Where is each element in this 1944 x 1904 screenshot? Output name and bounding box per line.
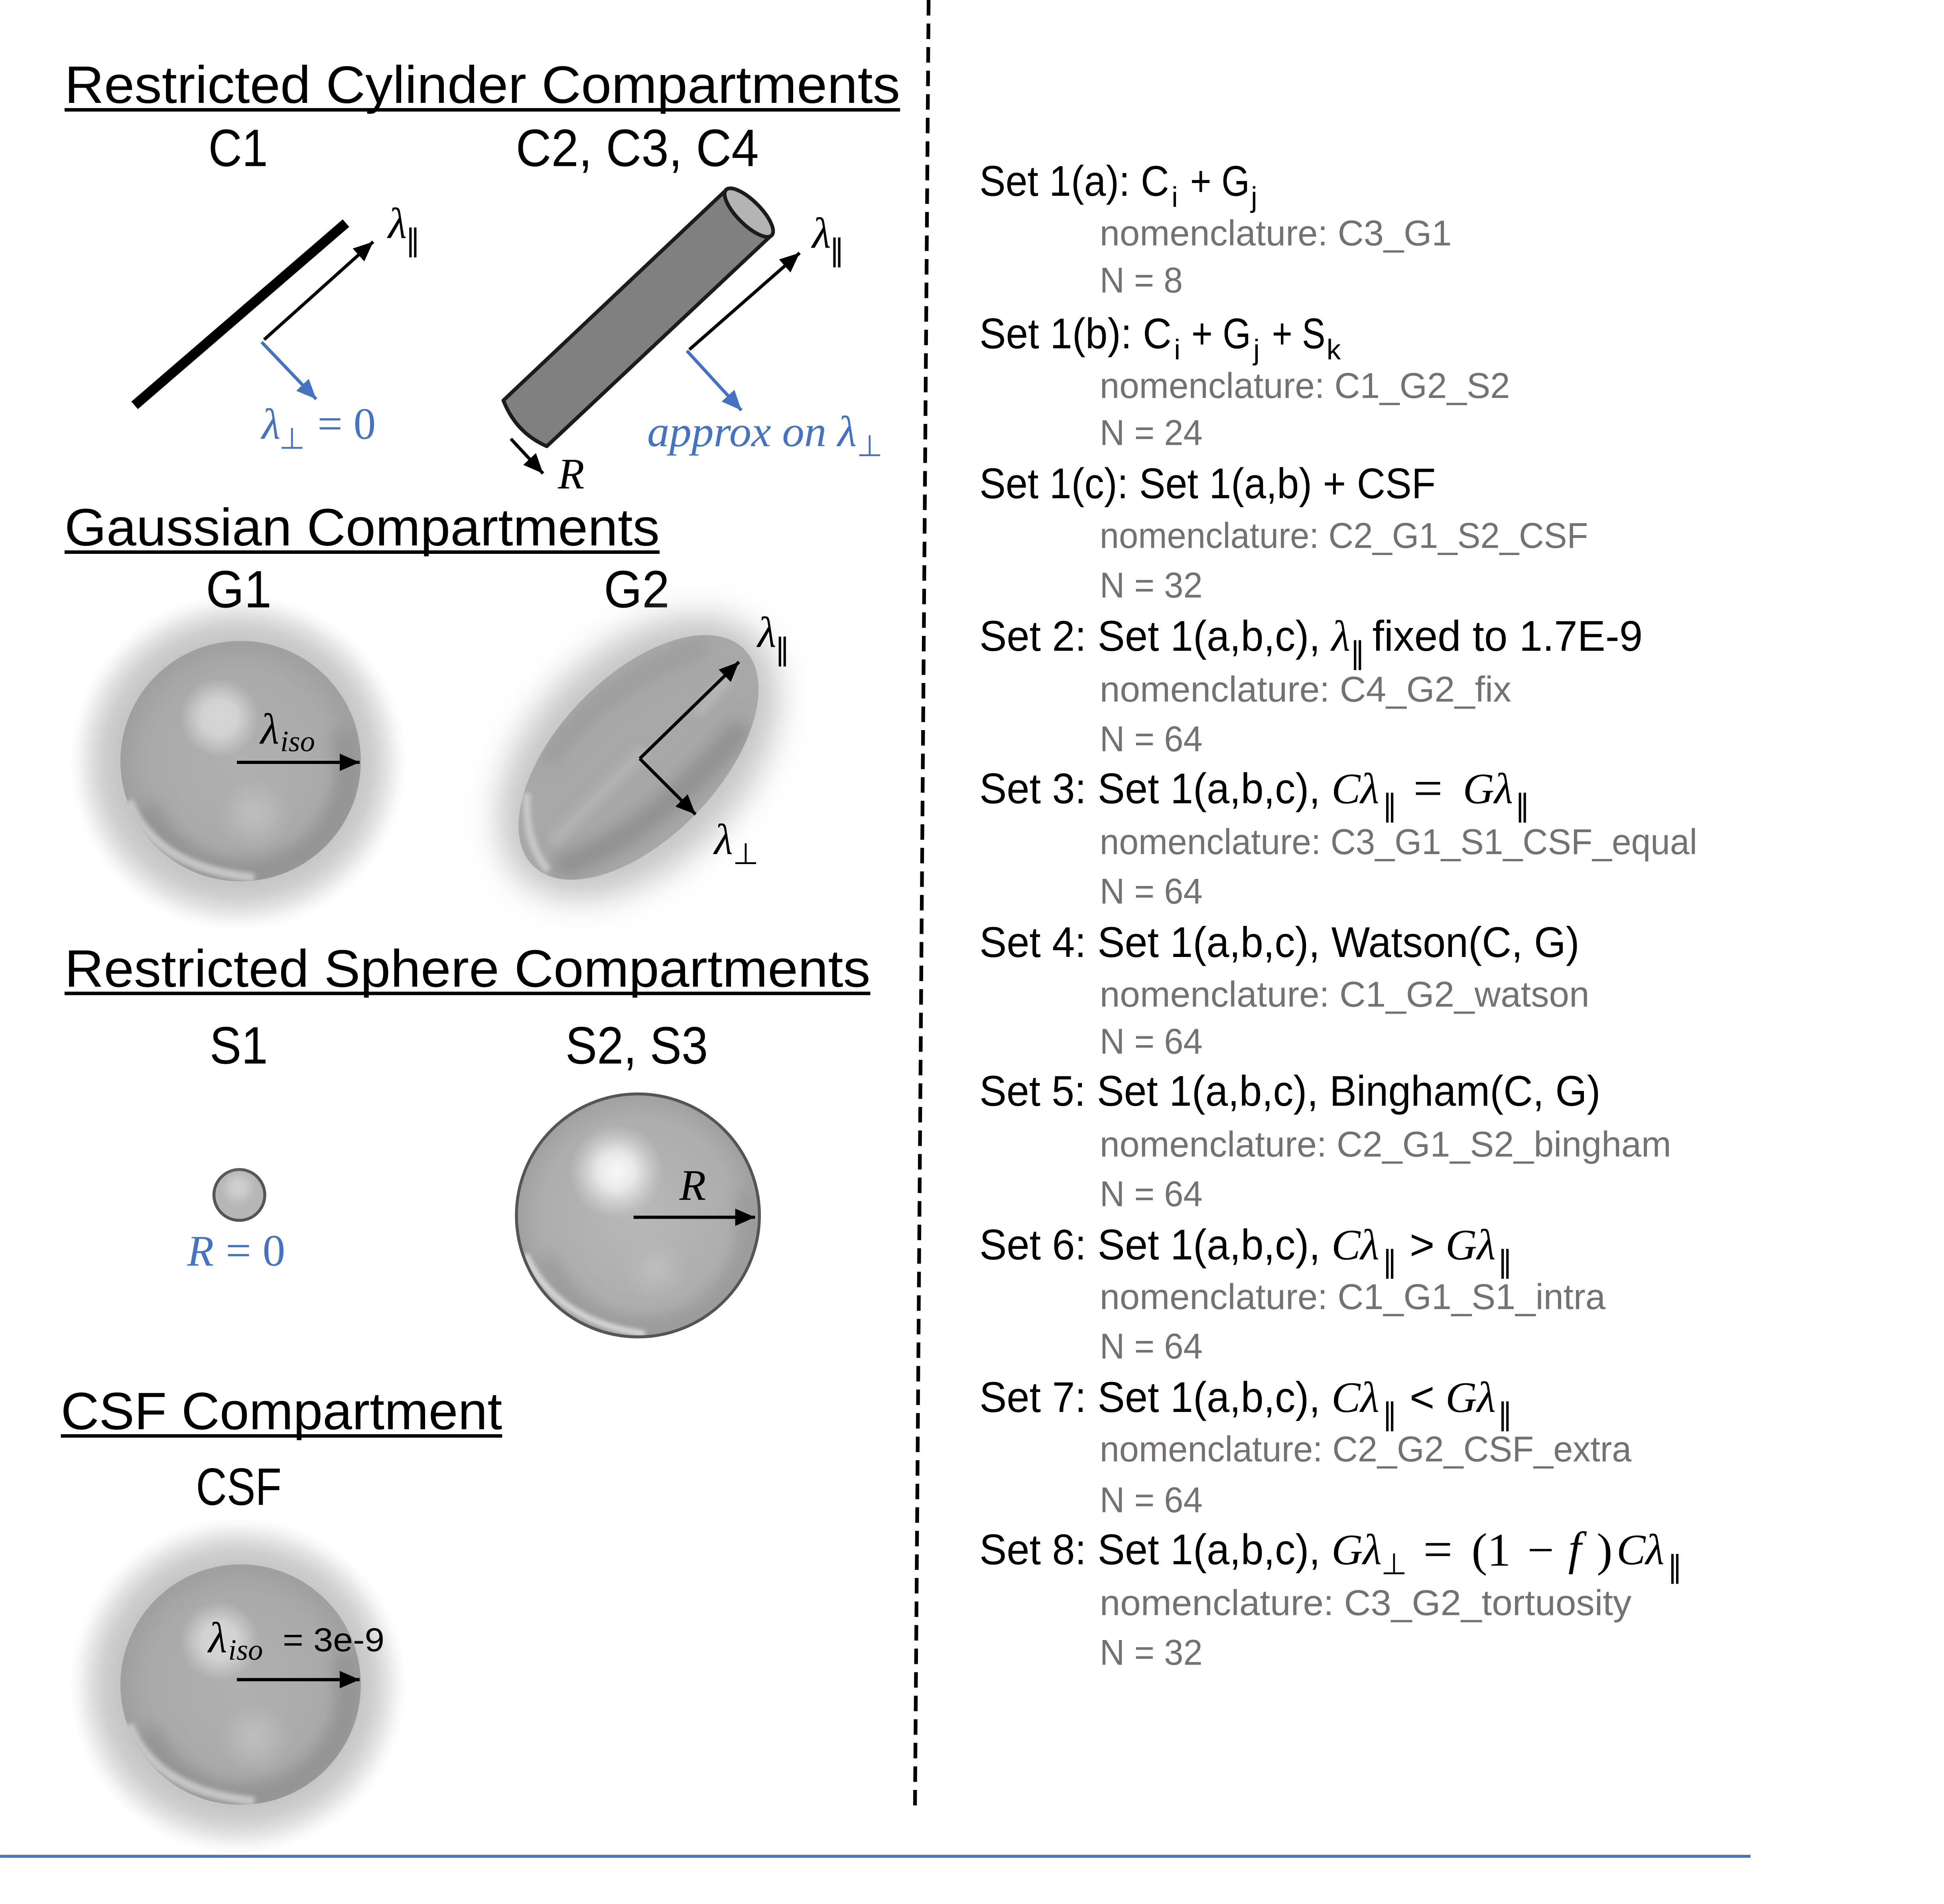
sphere body bbox=[120, 641, 361, 881]
text block: Set 1(b) bbox=[979, 310, 1510, 453]
set title: Gλ bbox=[1446, 1373, 1496, 1422]
set title: Set 5: Set 1(a,b,c), Bingham(C, G) bbox=[979, 1067, 1601, 1115]
set title: Gλ bbox=[1463, 764, 1513, 813]
label: G2: G2 bbox=[604, 559, 670, 618]
label: lambda perpendicular: λ bbox=[713, 815, 733, 864]
label: lambda iso = 3e-9 bbox=[207, 1614, 384, 1667]
label: G1: G1 bbox=[206, 559, 272, 618]
stick bbox=[135, 223, 346, 406]
arrow: parallel diffusivity bbox=[264, 242, 373, 340]
count: N = 64 bbox=[1100, 1174, 1203, 1214]
diagram: S1 small sphere bbox=[187, 1170, 285, 1276]
diagram: C2-C4 cylinder bbox=[503, 181, 882, 498]
text block: Set 2 bbox=[979, 612, 1643, 759]
label: R: R bbox=[679, 1161, 706, 1209]
label: approx on lambda perpendicular: approx on λ bbox=[647, 408, 857, 456]
nomenclature: nomenclature: C1_G2_S2 bbox=[1100, 366, 1510, 406]
label: R equals zero: R bbox=[187, 1227, 214, 1275]
label: lambda perpendicular: ⊥ bbox=[733, 837, 759, 871]
set title: j bbox=[1250, 181, 1257, 213]
text block: Set 8 bbox=[979, 1521, 1682, 1673]
set title: i bbox=[1172, 181, 1178, 213]
nomenclature: nomenclature: C3_G2_tortuosity bbox=[1100, 1583, 1631, 1623]
set title: Set 8: Set 1(a,b,c), bbox=[979, 1526, 1320, 1573]
arrow: lambda iso bbox=[237, 1679, 360, 1680]
label: CSF: CSF bbox=[196, 1457, 282, 1516]
cylinder end cap bbox=[718, 181, 780, 244]
label: lambda parallel bbox=[756, 608, 790, 667]
set title: > bbox=[1410, 1221, 1435, 1268]
label: approx on lambda perpendicular: ⊥ bbox=[857, 429, 882, 463]
set title: ) bbox=[1597, 1524, 1613, 1576]
set title: = bbox=[1413, 760, 1443, 817]
set title: Gλ bbox=[1446, 1221, 1496, 1269]
label: lambda perpendicular equals zero bbox=[260, 399, 376, 456]
nomenclature: nomenclature: C1_G1_S1_intra bbox=[1100, 1277, 1606, 1317]
text block: Set 1(c) bbox=[979, 460, 1588, 605]
text block: Set 5 bbox=[979, 1067, 1671, 1214]
label: lambda iso bbox=[259, 705, 315, 758]
sphere outline bbox=[516, 1094, 759, 1337]
label: lambda parallel: λ bbox=[811, 209, 831, 258]
nomenclature: nomenclature: C4_G2_fix bbox=[1100, 669, 1511, 710]
cylinder body bbox=[503, 190, 771, 446]
count: N = 64 bbox=[1100, 1326, 1203, 1366]
set title: Cλ bbox=[1331, 1373, 1379, 1422]
set title bbox=[979, 612, 1643, 670]
text block: Set 7 bbox=[979, 1373, 1632, 1520]
diagram: S2, S3 large sphere bbox=[516, 1094, 759, 1337]
count: N = 64 bbox=[1100, 1021, 1203, 1061]
set title: f bbox=[1568, 1522, 1587, 1575]
set title: Set 6: Set 1(a,b,c), bbox=[979, 1221, 1320, 1268]
label: lambda iso: λ bbox=[259, 705, 279, 753]
set title: − bbox=[1527, 1524, 1554, 1576]
label: C1: C1 bbox=[209, 118, 268, 177]
label: lambda iso = 3e-9: = 3e-9 bbox=[283, 1621, 384, 1658]
nomenclature: nomenclature: C2_G1_S2_CSF bbox=[1100, 516, 1588, 556]
set title: (1 bbox=[1471, 1524, 1511, 1576]
vertical dashed divider bbox=[915, 0, 929, 1808]
arrow: radius bbox=[634, 1217, 755, 1218]
label: C2, C3, C4: C2, C3, C4 bbox=[516, 118, 759, 177]
diagram: C1 stick cylinder bbox=[135, 199, 420, 456]
halo bbox=[445, 562, 832, 953]
arrow: lambda perpendicular bbox=[640, 759, 695, 814]
nomenclature: nomenclature: C2_G1_S2_bingham bbox=[1100, 1124, 1671, 1164]
set title bbox=[979, 157, 1257, 213]
set title: Set 7: Set 1(a,b,c), bbox=[979, 1373, 1320, 1421]
diagram: G2 ellipsoid bbox=[445, 562, 832, 953]
label: lambda perpendicular bbox=[713, 815, 759, 871]
set title: Cλ bbox=[1331, 1221, 1379, 1269]
set title: Set 3: Set 1(a,b,c), bbox=[979, 764, 1320, 812]
set title: = bbox=[1423, 1521, 1453, 1578]
label: lambda parallel: λ bbox=[756, 608, 776, 657]
count: N = 24 bbox=[1100, 413, 1203, 453]
label: R: R bbox=[557, 450, 585, 498]
set title: ⊥ bbox=[1381, 1547, 1407, 1581]
nomenclature: nomenclature: C2_G2_CSF_extra bbox=[1100, 1429, 1632, 1469]
label: lambda iso = 3e-9: λ bbox=[207, 1614, 227, 1662]
set title: λ bbox=[1330, 612, 1350, 660]
sphere body bbox=[120, 1564, 361, 1805]
label: lambda parallel: λ bbox=[387, 199, 407, 248]
set title bbox=[979, 1221, 1513, 1279]
set title: ‖ bbox=[1498, 1244, 1513, 1279]
label: lambda parallel: ‖ bbox=[406, 223, 420, 258]
sphere body bbox=[516, 1094, 759, 1337]
set title: Set 4: Set 1(a,b,c), Watson(C, G) bbox=[979, 918, 1580, 966]
label: R equals zero bbox=[187, 1226, 285, 1276]
arrow: parallel diffusivity bbox=[689, 253, 800, 350]
label: lambda parallel bbox=[811, 209, 844, 268]
count: N = 64 bbox=[1100, 719, 1203, 759]
label: lambda perpendicular equals zero: = 0 bbox=[317, 399, 376, 449]
label: S2, S3: S2, S3 bbox=[565, 1016, 708, 1075]
set title: ‖ bbox=[1667, 1549, 1682, 1584]
label: lambda perpendicular equals zero: ⊥ bbox=[279, 421, 305, 456]
count: N = 64 bbox=[1100, 871, 1203, 912]
set title: ‖ bbox=[1515, 788, 1530, 823]
set title bbox=[979, 1521, 1682, 1584]
label: S1: S1 bbox=[210, 1016, 268, 1075]
nomenclature: nomenclature: C3_G1 bbox=[1100, 213, 1452, 254]
label: lambda perpendicular equals zero: λ bbox=[260, 400, 280, 448]
label: lambda parallel: ‖ bbox=[829, 233, 844, 268]
set title bbox=[979, 310, 1341, 366]
set title: Set 1(c): Set 1(a,b) + CSF bbox=[979, 460, 1436, 508]
set title: Set 2: Set 1(a,b,c), bbox=[979, 612, 1320, 660]
halo bbox=[69, 1517, 407, 1855]
set title: ‖ bbox=[1350, 636, 1365, 670]
set title: < bbox=[1410, 1373, 1435, 1421]
nomenclature: nomenclature: C1_G2_watson bbox=[1100, 974, 1589, 1014]
label: lambda iso: iso bbox=[280, 725, 315, 758]
arrow: perpendicular diffusivity bbox=[262, 342, 316, 399]
heading: Gaussian Compartments: Gaussian Compartments bbox=[65, 498, 660, 557]
set title: j bbox=[1253, 334, 1260, 366]
text block: Set 4 bbox=[979, 918, 1589, 1061]
arrow: lambda parallel bbox=[640, 662, 739, 759]
halo bbox=[69, 594, 407, 931]
set title: + G bbox=[1190, 157, 1250, 205]
label: lambda parallel: ‖ bbox=[775, 632, 790, 667]
set title: Cλ bbox=[1617, 1526, 1664, 1574]
set title: fixed to 1.7E-9 bbox=[1373, 612, 1643, 660]
ellipsoid body bbox=[518, 635, 758, 880]
sphere bbox=[214, 1170, 265, 1221]
set title: + S bbox=[1272, 310, 1325, 358]
arrow: radius bbox=[511, 439, 543, 474]
set title: ‖ bbox=[1382, 1397, 1397, 1431]
nomenclature: nomenclature: C3_G1_S1_CSF_equal bbox=[1100, 822, 1697, 862]
set title: ‖ bbox=[1382, 1244, 1397, 1279]
set title: + G bbox=[1192, 310, 1251, 358]
heading: Restricted Cylinder Compartments: Restricted Cylinder Compartments bbox=[65, 55, 900, 114]
set title bbox=[979, 1373, 1513, 1431]
diagram: CSF sphere bbox=[69, 1517, 407, 1855]
label: lambda iso = 3e-9: iso bbox=[228, 1634, 263, 1667]
count: N = 32 bbox=[1100, 1632, 1203, 1673]
set title: i bbox=[1174, 334, 1180, 366]
set title: Cλ bbox=[1331, 764, 1379, 813]
set title bbox=[979, 760, 1530, 823]
text block: Set 3 bbox=[979, 760, 1697, 912]
set title: Gλ bbox=[1331, 1526, 1382, 1574]
label: lambda parallel bbox=[387, 199, 420, 258]
set title: Set 1(b): C bbox=[979, 310, 1172, 358]
set title: ‖ bbox=[1382, 788, 1397, 823]
count: N = 32 bbox=[1100, 565, 1203, 605]
text block: Set 6 bbox=[979, 1221, 1606, 1366]
set title: Set 1(a): C bbox=[979, 157, 1169, 205]
arrow: lambda iso bbox=[237, 762, 360, 763]
set title: k bbox=[1327, 334, 1341, 366]
heading: CSF Compartment: CSF Compartment bbox=[61, 1381, 502, 1440]
bottom blue rule bbox=[0, 1856, 1751, 1857]
label: R equals zero: = 0 bbox=[226, 1226, 285, 1276]
diagram: G1 sphere bbox=[69, 594, 407, 931]
text block: Set 1(a) bbox=[979, 157, 1452, 301]
count: N = 8 bbox=[1100, 260, 1183, 301]
count: N = 64 bbox=[1100, 1480, 1203, 1520]
arrow: perpendicular approximation bbox=[687, 351, 741, 410]
heading: Restricted Sphere Compartments: Restricted Sphere Compartments bbox=[65, 939, 871, 998]
set title: ‖ bbox=[1498, 1397, 1513, 1431]
